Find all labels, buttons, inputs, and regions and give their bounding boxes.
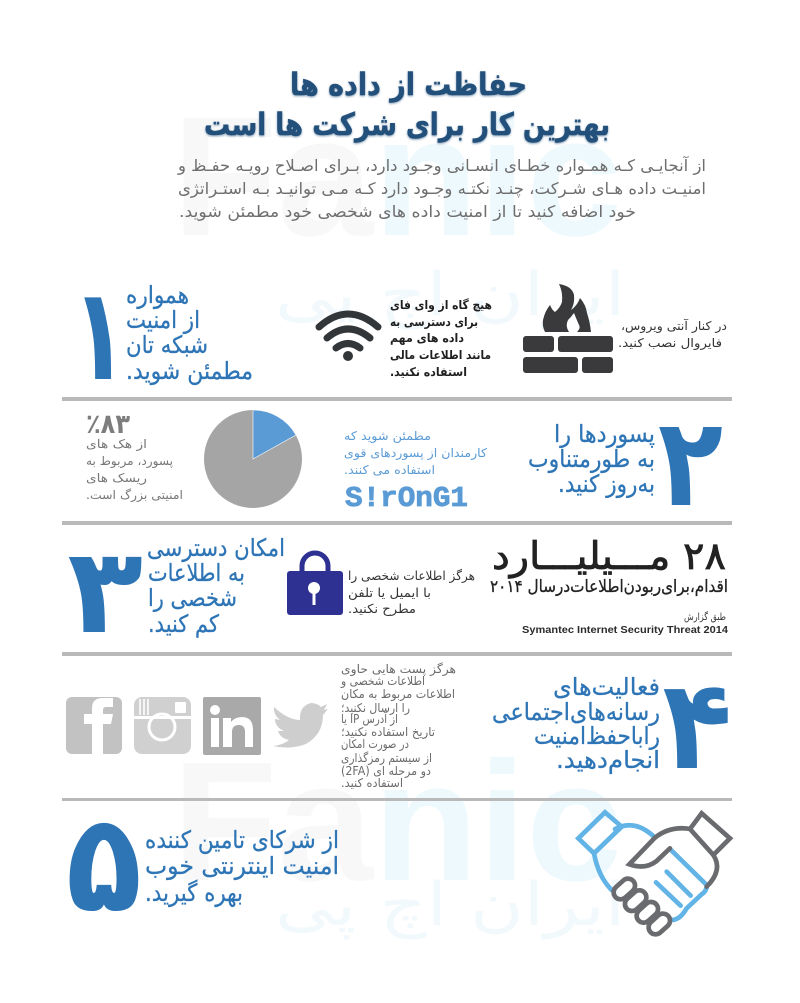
privacy text <box>340 662 456 790</box>
privacy text: در صورت امکان <box>341 737 409 752</box>
icon: linkedin <box>203 697 261 755</box>
firewall text: فایروال نصب کنید. <box>618 336 722 351</box>
icon: firewall <box>523 284 613 373</box>
panel: section 3 <box>67 522 728 660</box>
password sample: S!rOnG1 <box>345 482 468 515</box>
intro text: خود اضافه کنید تا از امنیت داده های شخصی خود مطمئن شوید. <box>179 202 636 222</box>
panel: section 2 <box>86 392 723 535</box>
panel: section 1 <box>71 261 727 410</box>
numeral 3: ۳ <box>67 522 143 660</box>
heading 5: از شرکای تامین کننده <box>145 826 339 854</box>
numeral 4: ۴ <box>662 653 732 798</box>
numeral 2: ۲ <box>658 392 723 535</box>
padlock text: مطرح نکنید. <box>348 601 416 617</box>
privacy text: هرگز پست هایی حاوی <box>341 662 456 677</box>
privacy text: اطلاعات مربوط به مکان <box>341 687 455 702</box>
watermark: ایران اچ پی <box>275 870 625 940</box>
title <box>204 67 610 143</box>
strong password text: استفاده می کنند. <box>344 463 435 477</box>
watermark: Fanic <box>172 727 622 917</box>
divider <box>62 798 732 801</box>
heading 1: شبکه تان <box>126 331 208 359</box>
heading 4: رسانه‌های‌اجتماعی <box>492 698 660 726</box>
statistic text: پسورد، مربوط به <box>86 454 173 469</box>
heading 3 <box>147 534 285 638</box>
title: حفاظت از داده ها <box>290 67 527 103</box>
firewall text: در کنار آنتی ویروس، <box>621 318 727 334</box>
privacy text: را ارسال نکنید؛ <box>341 701 410 716</box>
panel: section 5 <box>66 784 730 942</box>
strong password text <box>344 429 487 477</box>
heading 3: شخصی را <box>148 584 237 612</box>
watermark <box>172 82 625 940</box>
numeral 5: ۵ <box>66 784 142 942</box>
strong password text: مطمئن شوید که <box>344 429 431 444</box>
intro text: امنیـت داده هـای شـرکت، چنـد نکتـه وجـود دارد کـه مـی توانیـد بـه استـراتژی <box>178 179 706 199</box>
wifi text: هیچ گاه از وای فای <box>390 298 492 313</box>
statistic 28 billion: ۲۸ مـــیلیـــارد <box>492 534 726 578</box>
heading 1: مطمئن شوید. <box>126 357 253 385</box>
heading 4 <box>492 673 660 774</box>
divider <box>62 652 732 656</box>
privacy text: دو مرحله ای (2FA) <box>341 764 431 779</box>
icon: wifi <box>319 314 378 361</box>
heading 4: انجام‌دهید. <box>556 746 660 774</box>
panel: section 4 <box>66 653 732 798</box>
heading 4: راباحفظ‌امنیت <box>534 722 660 750</box>
source name: Symantec Internet Security Threat 2014 <box>522 624 728 636</box>
wifi text: داده های مهم <box>390 331 464 345</box>
statistic text: امنیتی بزرگ است. <box>86 488 183 503</box>
heading 2: پسوردها را <box>554 420 655 448</box>
privacy text: از سیستم رمزگذاری <box>341 751 432 766</box>
title: بهترین کار برای شرکت ها است <box>204 107 610 143</box>
statistic caption: اقدام،برای‌ربودن‌اطلاعات‌درسال ۲۰۱۴ <box>490 577 728 597</box>
privacy text: استفاده کنید. <box>341 776 403 790</box>
heading 3: کم کنید. <box>148 610 219 638</box>
heading 5 <box>145 826 339 907</box>
padlock text <box>348 568 475 617</box>
privacy text: اطلاعات شخصی و <box>340 674 425 689</box>
heading 2: به‌روز کنید. <box>558 470 655 498</box>
heading 2 <box>528 420 655 498</box>
divider <box>62 521 732 525</box>
wifi text: مانند اطلاعات مالی <box>390 348 491 362</box>
statistic text: از هک های <box>86 437 147 452</box>
heading 4: فعالیت‌های <box>553 673 660 701</box>
padlock text: با ایمیل یا تلفن <box>348 585 431 601</box>
icon: twitter <box>273 703 328 748</box>
heading 1: از امنیت <box>126 306 200 334</box>
statistic text <box>86 437 183 503</box>
privacy text: تاریخ استفاده نکنید؛ <box>341 725 435 740</box>
wifi text: برای دسترسی به <box>390 315 478 329</box>
pie chart <box>204 410 302 508</box>
heading 5: بهره گیرید. <box>145 879 243 907</box>
watermark: ایران اچ پی <box>275 260 625 330</box>
numeral 1: ۱ <box>71 261 128 410</box>
firewall text <box>618 318 727 351</box>
icon: handshake <box>578 812 730 937</box>
wifi text: استفاده نکنید. <box>390 365 467 379</box>
heading 5: امنیت اینترنتی خوب <box>145 852 339 880</box>
icon: padlock <box>287 553 343 615</box>
watermark: Fanic <box>172 82 622 272</box>
heading 1: همواره <box>126 281 189 309</box>
heading 1 <box>126 281 253 385</box>
statistic text: ریسک های <box>86 471 147 486</box>
intro text <box>177 156 706 222</box>
heading 3: به اطلاعات <box>148 559 245 587</box>
privacy text: از آدرس IP یا <box>341 711 398 727</box>
padlock text: هرگز اطلاعات شخصی را <box>348 568 475 584</box>
intro text: از آنجایـی کـه همـواره خطـای انسـانی وجـود دارد، بـرای اصـلاح رویـه حفـظ و <box>177 156 706 176</box>
divider <box>62 397 732 401</box>
heading 3: امکان دسترسی <box>147 534 285 562</box>
source label: طبق گزارش <box>684 611 726 623</box>
wifi text <box>390 298 492 379</box>
statistic 83 percent: ٪۸۳ <box>86 409 130 440</box>
heading 2: به طورمتناوب <box>528 445 655 473</box>
icon: instagram <box>134 697 191 754</box>
strong password text: کارمندان از پسوردهای قوی <box>344 446 487 461</box>
icon: facebook <box>66 697 122 754</box>
